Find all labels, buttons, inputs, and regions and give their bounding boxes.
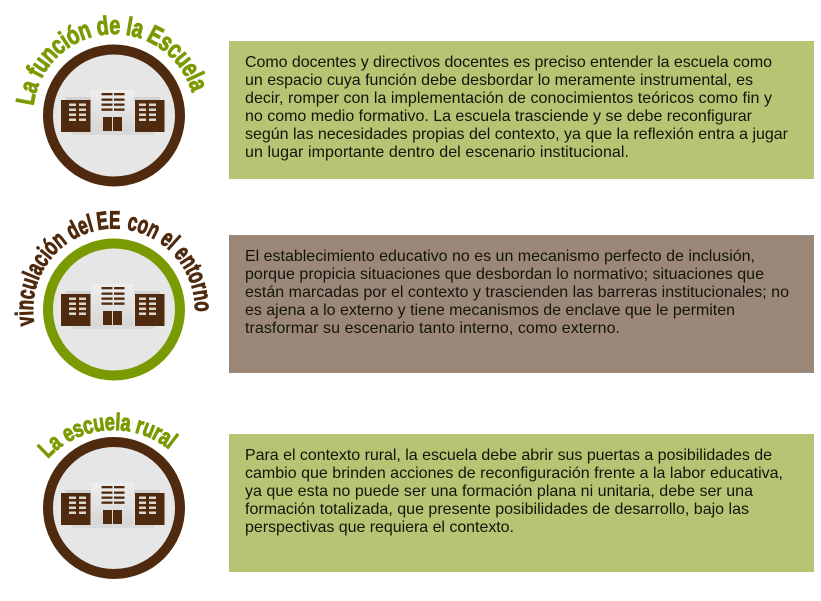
curved heading 1: i	[54, 26, 75, 54]
curved heading 2: E	[109, 206, 121, 234]
curved heading 2: l	[84, 209, 96, 238]
text block 2: trasformar su escenario tanto interno, como externo.	[245, 320, 620, 337]
panel: text 2	[229, 235, 814, 373]
curved heading 1: l	[124, 11, 135, 41]
curved heading 1: e	[109, 10, 121, 40]
text block 1: un espacio cuya función debe desbordar lo meramente instrumental, es	[245, 72, 753, 89]
curved heading 2: v	[11, 315, 40, 328]
text block 3: cambio que brinden acciones de reconfiguración frente a la labor educativa,	[245, 465, 783, 482]
curved heading 1: ó	[60, 19, 84, 51]
curved heading 2: n	[143, 215, 165, 245]
curved heading 1: L	[10, 90, 41, 107]
curved heading 1	[10, 10, 214, 107]
curved heading 2: E	[95, 206, 110, 236]
circle badge 3	[48, 442, 180, 574]
text block 1	[245, 54, 789, 161]
text block 3	[245, 447, 783, 536]
panel: text 1	[229, 41, 814, 179]
curved heading 1: l	[181, 68, 210, 85]
curved heading 2: i	[11, 310, 39, 316]
curved heading 2: e	[73, 211, 92, 241]
curved heading 2: o	[182, 267, 212, 287]
curved heading 1: a	[183, 74, 214, 95]
icon: school building 2	[61, 284, 164, 329]
curved heading 1: E	[143, 19, 168, 51]
curved heading 3: l	[115, 409, 121, 436]
curved heading 2: t	[180, 260, 207, 278]
curved heading 2: e	[169, 240, 196, 265]
text block 2: El establecimiento educativo no es un mecanismo perfecto de inclusión,	[245, 248, 755, 265]
icon: school building 1	[61, 90, 164, 135]
curved heading 1: a	[13, 76, 44, 96]
curved heading 1: c	[162, 35, 190, 64]
curved heading 1: e	[176, 56, 207, 81]
curved heading 3: a	[42, 428, 67, 456]
curved heading 1: s	[154, 27, 180, 57]
section 1: La función de la Escuela	[10, 10, 814, 182]
curved heading 1: n	[74, 14, 95, 46]
curved heading 3: a	[119, 409, 133, 437]
circle badge 1	[48, 50, 180, 182]
curved heading 3: c	[79, 411, 96, 440]
curved heading 2: ó	[36, 234, 64, 261]
curved heading 3: u	[139, 414, 159, 443]
curved heading 2: u	[14, 275, 44, 293]
text block 1: un lugar importante dentro del escenario institucional.	[245, 144, 629, 161]
section 3: La escuela rural	[33, 408, 814, 574]
curved heading 2: l	[162, 231, 185, 255]
curved heading 1: d	[95, 10, 110, 41]
text block 2: es ajena a lo externo y tiene mecanismos de enclave que le permiten	[245, 302, 735, 319]
curved heading 3: l	[162, 430, 182, 454]
curved heading 3: e	[57, 419, 79, 448]
curved heading 2: n	[46, 225, 71, 254]
curved heading 2: c	[12, 287, 41, 301]
text block 3: formación totalizada, que presente posibilidades de desarrollo, bajo las	[245, 501, 749, 518]
curved heading 2: i	[32, 243, 57, 264]
curved heading 3: L	[33, 436, 60, 463]
curved heading 2: o	[134, 210, 153, 240]
circle badge 2	[48, 244, 180, 376]
text block 1: no como medio formativo. La escuela trasciende y se debe reconfigurar	[245, 108, 753, 125]
curved heading 1: u	[169, 45, 199, 72]
curved heading 2: a	[20, 257, 50, 279]
curved heading 3: s	[68, 415, 87, 443]
curved heading 3: a	[154, 423, 177, 451]
curved heading 1: c	[43, 30, 71, 60]
text block 2: están marcadas por el contexto y trascienden las barreras institucionales; no	[245, 284, 789, 301]
text block 1: Como docentes y directivos docentes es preciso entender la escuela como	[245, 54, 772, 71]
text block 3: Para el contexto rural, la escuela debe abrir sus puertas a posibilidades de	[245, 447, 772, 464]
curved heading 2: r	[186, 279, 214, 293]
section 2: vinculación del EE con el entorno	[11, 206, 814, 376]
curved heading 1: f	[20, 62, 49, 82]
text block 3: perspectivas que requiera el contexto.	[245, 519, 514, 536]
curved heading 2: e	[155, 224, 180, 252]
curved heading 2: c	[125, 208, 141, 237]
text block 1: según las necesidades propias del contexto, ya que la reflexión entra a jugar	[245, 126, 789, 143]
curved heading 3: r	[148, 419, 167, 446]
curved heading 2: o	[189, 301, 217, 312]
text block 3: ya que esta no puede ser una formación plana ni unitaria, debe ser una	[245, 483, 753, 500]
curved heading 2: l	[18, 268, 45, 283]
curved heading 3: r	[133, 412, 147, 440]
curved heading 2	[11, 206, 217, 328]
text block 1: decir, romper con la implementación de conocimientos teóricos como fin y	[245, 90, 772, 107]
curved heading 3: u	[91, 409, 106, 437]
curved heading 2: c	[26, 248, 54, 271]
curved heading 1: a	[129, 13, 147, 44]
text block 2	[245, 248, 789, 337]
icon: school building 3	[61, 483, 164, 528]
curved heading 2: n	[11, 299, 39, 311]
panel: text 3	[229, 434, 814, 572]
curved heading 1: n	[33, 39, 63, 68]
curved heading 2: n	[174, 249, 204, 273]
curved heading 3: e	[104, 408, 115, 436]
curved heading 1: u	[24, 51, 55, 77]
text block 2: porque propicia situaciones que desbordan lo normativo; situaciones que	[245, 266, 764, 283]
curved heading 2: n	[187, 288, 217, 302]
curved heading 2: d	[62, 216, 84, 245]
curved heading 3	[33, 408, 182, 463]
